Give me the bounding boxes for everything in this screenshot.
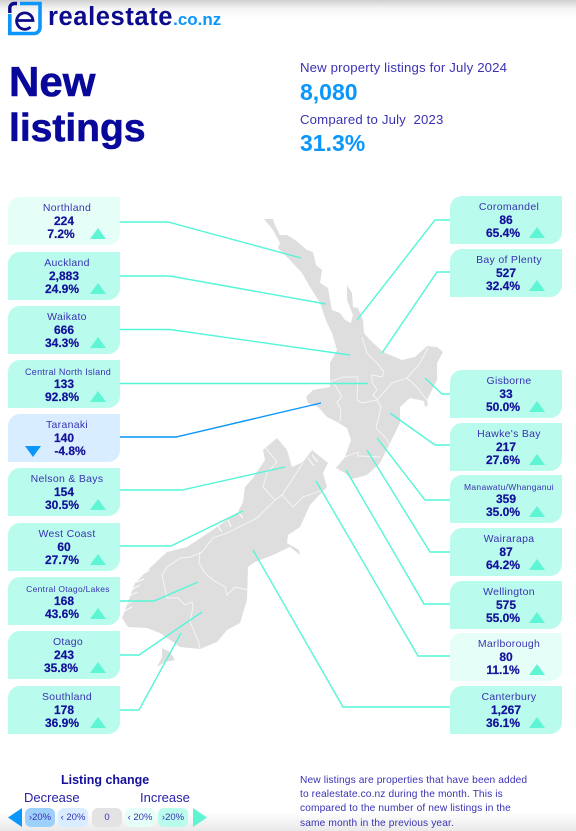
- panel: Canterbury: [450, 686, 562, 734]
- panel: Taranaki: -4.8%: [54, 444, 86, 458]
- panel: West Coast: 60: [57, 540, 71, 554]
- panel: Auckland: [8, 252, 120, 300]
- title: New: [9, 58, 95, 105]
- panel: Hawke's Bay: [450, 423, 562, 471]
- legend pill: small decrease: ‹ 20%: [61, 812, 85, 823]
- logo: [8, 2, 221, 36]
- legend pill: small increase: [125, 808, 155, 827]
- panel: Auckland: 2,883: [49, 269, 79, 283]
- panel: West Coast: West Coast: [38, 528, 96, 540]
- panel: Bay of Plenty: Bay of Plenty: [476, 254, 542, 266]
- panel: West Coast: [8, 523, 120, 571]
- panel: Otago: [8, 631, 120, 679]
- panel: Waikato: Waikato: [47, 311, 87, 323]
- panel: Wairarapa: 87: [499, 545, 513, 559]
- panel: Taranaki: 140: [54, 431, 74, 445]
- legend label: increase: Increase: [140, 790, 190, 805]
- legend pill: large increase: ›20%: [162, 812, 184, 823]
- legend pill: no change: [92, 808, 122, 827]
- panel: Central Otago/Lakes: 43.6%: [45, 607, 79, 621]
- stat value: change: 31.3%: [300, 130, 365, 156]
- panel: Hawke's Bay: 217: [496, 440, 516, 454]
- panel: Canterbury: 1,267: [491, 703, 521, 717]
- panel: Central Otago/Lakes: Central Otago/Lakes: [26, 584, 110, 594]
- panel: Gisborne: 50.0%: [486, 400, 520, 414]
- panel: Marlborough: 80: [499, 650, 513, 664]
- panel: Wellington: 575: [496, 598, 516, 612]
- stat label: listings: New property listings for July 2024: [300, 60, 507, 75]
- panel: Central North Island: 133: [54, 377, 74, 391]
- panel: Otago: 243: [54, 648, 74, 662]
- panel: Marlborough: 11.1%: [486, 663, 520, 677]
- logo icon: [8, 2, 42, 36]
- panel: Gisborne: [450, 370, 562, 418]
- logo wordmark: realestate.co.nz: [48, 3, 221, 31]
- footnote: [300, 775, 527, 829]
- panel: Wellington: [450, 581, 562, 629]
- panel: Northland: Northland: [43, 202, 91, 214]
- panel: Marlborough: Marlborough: [478, 638, 540, 650]
- panel: Gisborne: Gisborne: [486, 375, 532, 387]
- panel: Nelson & Bays: 154: [54, 485, 74, 499]
- panel: Bay of Plenty: 32.4%: [486, 279, 520, 293]
- legend title: Listing change: [61, 773, 149, 787]
- panel: Waikato: 34.3%: [45, 336, 79, 350]
- panel: Manawatu/Whanganui: Manawatu/Whanganui: [464, 482, 554, 492]
- panel: Central Otago/Lakes: 168: [54, 594, 74, 608]
- legend label: decrease: Decrease: [24, 790, 80, 805]
- panel: Nelson & Bays: Nelson & Bays: [31, 473, 103, 485]
- panel: Otago: Otago: [53, 636, 83, 648]
- legend pill: large decrease: [25, 808, 55, 827]
- stats block: [300, 60, 507, 156]
- leader lines: [120, 220, 450, 710]
- panel: Manawatu/Whanganui: [450, 475, 562, 523]
- legend arrow: decrease: [8, 808, 22, 827]
- legend pill: no change: 0: [104, 812, 110, 823]
- panel: Northland: 224: [54, 214, 74, 228]
- panel: Taranaki: [8, 414, 120, 462]
- legend pill: small increase: ‹ 20%: [128, 812, 152, 823]
- panel: Waikato: [8, 306, 120, 354]
- stat value: listings: 8,080: [300, 79, 358, 105]
- panel: Coromandel: [450, 196, 562, 244]
- panel: Central North Island: [8, 360, 120, 408]
- panel: Wellington: Wellington: [483, 586, 535, 598]
- panel: Hawke's Bay: Hawke's Bay: [477, 428, 541, 440]
- panel: Wairarapa: 64.2%: [486, 558, 520, 572]
- panel: Southland: 36.9%: [45, 716, 79, 730]
- title: [9, 58, 146, 150]
- panel: West Coast: 27.7%: [45, 553, 79, 567]
- panel: Coromandel: 86: [499, 213, 513, 227]
- legend arrow: increase: [193, 808, 207, 827]
- panel: Canterbury: Canterbury: [482, 691, 536, 703]
- panel: Central North Island: 92.8%: [45, 390, 79, 404]
- leader line: Taranaki: [120, 403, 321, 437]
- panel: Taranaki: Taranaki: [46, 419, 88, 431]
- legend: [8, 773, 207, 827]
- panel: Northland: [8, 197, 120, 245]
- legend pill: large increase: [158, 808, 188, 827]
- South Island: [122, 438, 328, 649]
- panel: Central Otago/Lakes: [8, 577, 120, 625]
- panel: Central North Island: Central North Island: [25, 367, 111, 377]
- title: listings: [9, 107, 146, 150]
- panel: Coromandel: Coromandel: [479, 201, 539, 213]
- panel: Wairarapa: Wairarapa: [484, 533, 534, 545]
- panel: Wellington: 55.0%: [486, 611, 520, 625]
- panel: Waikato: 666: [54, 323, 74, 337]
- panel: Southland: 178: [54, 703, 74, 717]
- footnote: compared to the number of new listings in the: [300, 803, 511, 814]
- panel: Wairarapa: [450, 528, 562, 576]
- North Island: [264, 219, 443, 479]
- panel: Bay of Plenty: 527: [496, 266, 516, 280]
- Stewart Island: [157, 648, 175, 667]
- panel: Auckland: Auckland: [44, 257, 90, 269]
- stat label: compared: Compared to July 2023: [300, 112, 444, 127]
- panel: Gisborne: 33: [499, 387, 513, 401]
- panel: Manawatu/Whanganui: 35.0%: [486, 505, 520, 519]
- panel: Manawatu/Whanganui: 359: [496, 492, 516, 506]
- panel: Nelson & Bays: [8, 468, 120, 516]
- panel: Nelson & Bays: 30.5%: [45, 498, 79, 512]
- panel: Hawke's Bay: 27.6%: [486, 453, 520, 467]
- footnote: same month in the previous year.: [300, 818, 454, 829]
- legend pill: small decrease: [58, 808, 88, 827]
- panel: Otago: 35.8%: [44, 661, 78, 675]
- footnote: New listings are properties that have been added: [300, 775, 527, 786]
- footnote: to realestate.co.nz during the month. This is: [300, 789, 503, 800]
- panel: Southland: Southland: [42, 691, 92, 703]
- panel: Southland: [8, 686, 120, 734]
- panel: Bay of Plenty: [450, 249, 562, 297]
- bottom shadow: [0, 812, 576, 831]
- top shadow: [0, 0, 576, 18]
- panel: Canterbury: 36.1%: [486, 716, 520, 730]
- panel: Coromandel: 65.4%: [486, 226, 520, 240]
- panel: Marlborough: [450, 633, 562, 681]
- legend pill: large decrease: ›20%: [29, 812, 51, 823]
- panel: Auckland: 24.9%: [45, 282, 79, 296]
- panel: Northland: 7.2%: [47, 227, 75, 241]
